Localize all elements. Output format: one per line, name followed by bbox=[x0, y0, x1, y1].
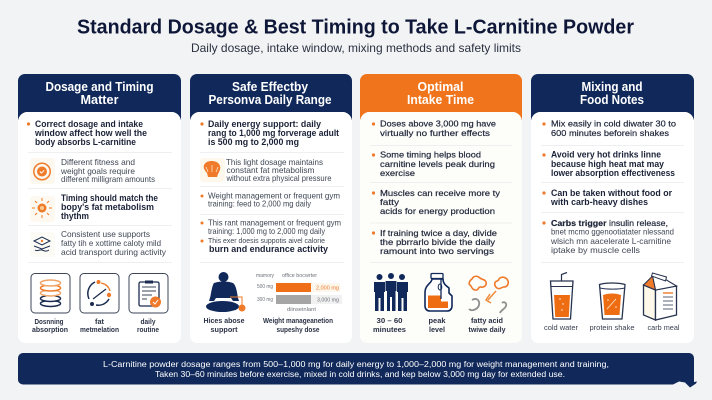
hot drinks bullet: Avoid very hot drinks linne bbox=[551, 150, 661, 160]
weight management bullet: Weight management or frequent gym bbox=[208, 190, 340, 200]
lead bullet: is 500 mg to 2,000 mg bbox=[208, 137, 299, 147]
panel 2 header: Safe Effectby bbox=[232, 80, 308, 94]
icon labels: daily bbox=[140, 317, 156, 326]
panel 4 header: Food Notes bbox=[580, 93, 644, 107]
light dosage text bbox=[226, 157, 332, 183]
icon labels: twiwe daily bbox=[468, 325, 506, 334]
timing bullet: exercise bbox=[380, 168, 415, 178]
muscles bullet: Muscles can receive more ty bbox=[380, 188, 501, 198]
icon labels bbox=[544, 323, 680, 332]
icon labels: fat bbox=[95, 317, 104, 326]
title: Standard Dosage & Best Timing to Take L-Carnitine Powder bbox=[77, 16, 634, 38]
goals text: Different fitness and bbox=[61, 157, 135, 167]
bar chart: 300 mg bbox=[257, 297, 273, 303]
footer summary banner: L-Carnitine powder dosage ranges from 500–1,000 mg for daily energy to 1,000–2,000 mg for weight management and training, bbox=[103, 360, 609, 369]
lead bullet: rang to 1,000 mg forverage adult bbox=[208, 128, 339, 138]
carbs bullet: iptake by muscle cells bbox=[551, 245, 640, 255]
weight management bullet: training: feed to 2,000 mg daily bbox=[208, 198, 312, 208]
icon: fatty acid molecules bbox=[469, 276, 508, 313]
icon labels: protein shake bbox=[590, 323, 634, 332]
lead bullet: Daily energy support: daily bbox=[208, 119, 321, 129]
icon: stacked discs bbox=[31, 274, 70, 313]
icon: target badge bbox=[30, 158, 55, 184]
twice a day bullet bbox=[372, 228, 497, 256]
timing text: thythm bbox=[61, 211, 89, 221]
icon labels bbox=[373, 316, 506, 334]
bar chart bbox=[256, 273, 342, 313]
icon: sun bbox=[30, 196, 55, 222]
panel 1 header: Dosage and Timing bbox=[46, 80, 154, 94]
carbs bullet: wlsich mn aacelerate L-carnitine bbox=[550, 236, 671, 246]
person caption bbox=[204, 316, 244, 334]
icon labels: metmelation bbox=[80, 325, 119, 334]
hot drinks bullet bbox=[542, 150, 675, 178]
training bullets bbox=[200, 218, 341, 254]
weight management bullet bbox=[200, 190, 340, 208]
mix bullet: 600 minutes beforein shakes bbox=[551, 128, 669, 138]
icon labels: carb meal bbox=[648, 323, 680, 332]
food bullet bbox=[542, 188, 672, 207]
lead bullet: Correct dosage and intake bbox=[35, 119, 143, 129]
icon labels: absorption bbox=[32, 325, 68, 334]
icon: protein shake glass bbox=[600, 283, 625, 319]
icon: seated person bbox=[206, 272, 246, 312]
icon labels: 30 – 60 bbox=[376, 316, 402, 325]
doses bullet bbox=[372, 118, 496, 138]
panel: optimal intake time bbox=[360, 74, 522, 343]
goals text bbox=[60, 157, 155, 184]
mix bullet: Mix easily in cold diwater 30 to bbox=[551, 118, 676, 128]
doses bullet: virtually no further effects bbox=[380, 128, 490, 138]
panel: safe effective daily range bbox=[190, 74, 352, 343]
doses bullet: Doses above 3,000 mg have bbox=[380, 118, 496, 128]
panel 3 header: Optimal bbox=[418, 80, 464, 94]
timing bullet bbox=[372, 150, 495, 178]
bar chart: office bocwrter bbox=[282, 273, 317, 279]
consistent use text: fatty tih e xottime caloty mild bbox=[61, 238, 161, 248]
icon labels: Dosnning bbox=[34, 317, 64, 326]
bar chart: 500 mg bbox=[257, 284, 273, 290]
bar chart: 2,000 mg bbox=[316, 286, 339, 292]
hot drinks bullet: because high heat mat may bbox=[551, 159, 664, 169]
icon labels: routine bbox=[137, 325, 159, 334]
timing text: Timing should match the bbox=[61, 193, 158, 203]
consistent use text: acid transport during activity bbox=[61, 247, 167, 257]
timing text bbox=[61, 193, 158, 221]
icon: bottle bbox=[425, 274, 452, 311]
twice a day bullet: ramount into two servings bbox=[380, 246, 494, 256]
muscles bullet: fatty bbox=[380, 197, 400, 207]
chart caption bbox=[263, 316, 333, 334]
mix bullet bbox=[542, 118, 676, 138]
hot drinks bullet: lower absorption effectiveness bbox=[551, 168, 675, 178]
consistent use text bbox=[61, 229, 167, 257]
icon labels: peak bbox=[428, 316, 446, 325]
chart caption: Weight manageanetion bbox=[263, 316, 333, 325]
twice a day bullet: the pbrrarlo bivide the daily bbox=[380, 237, 496, 247]
lead bullet: body absorbs L-carnitine bbox=[35, 137, 136, 147]
panel 2 header: Personva Daily Range bbox=[208, 93, 332, 107]
timing bullet: Some timing helps blood bbox=[380, 150, 481, 160]
goals text: weight goals require bbox=[60, 166, 135, 176]
training bullets: This rant management or frequent gym bbox=[208, 218, 341, 228]
food bullet: with carb-heavy dishes bbox=[550, 197, 648, 207]
icon: orange shell bbox=[200, 158, 225, 182]
muscles bullet bbox=[372, 188, 501, 216]
bar chart: diinseinlant bbox=[287, 307, 317, 313]
timing text: bopy's fat metabolism bbox=[61, 202, 154, 212]
panel 3 header: Intake Time bbox=[407, 93, 474, 107]
light dosage text: constant fat metabolism bbox=[226, 165, 314, 175]
footer summary banner: Taken 30–60 minutes before exercise, mixed in cold drinks, and kep below 3,000 mg day for extended use. bbox=[155, 370, 565, 379]
consistent use text: Consistent use supports bbox=[61, 229, 150, 239]
lead bullet: window affect how well the bbox=[34, 128, 147, 138]
goals text: different milligram amounts bbox=[61, 174, 155, 184]
footer summary banner bbox=[18, 353, 697, 388]
timing bullet: carnitine levels peak during bbox=[380, 159, 495, 169]
panel 1 header: Matter bbox=[80, 93, 119, 107]
training bullets: training: 1,000 mg to 2,000 mg daily bbox=[208, 226, 326, 236]
carbs bullet: Carbs trigger insulin release, bbox=[551, 218, 668, 228]
icon: clipboard routine bbox=[129, 274, 168, 313]
icon: carb meal carton bbox=[644, 273, 676, 320]
icon: transport bbox=[30, 232, 55, 257]
carbs bullet: bnet mcmo ggenootiatater nlessand bbox=[551, 226, 674, 236]
chart caption: supeshy dose bbox=[276, 325, 320, 334]
carbs bullet bbox=[542, 218, 674, 255]
panel: mixing and food notes bbox=[531, 74, 694, 343]
lead bullet bbox=[200, 119, 339, 147]
training bullets: burn and endurance activity bbox=[209, 244, 328, 254]
panel 1 header bbox=[18, 74, 181, 128]
light dosage text: This light dosage maintains bbox=[226, 157, 323, 167]
icon: cold water glass bbox=[550, 272, 573, 319]
light dosage text: without extra physical pressure bbox=[226, 173, 332, 183]
bar chart: mamory bbox=[256, 273, 274, 279]
training bullets: This exer doesis suppotis aivel calorie bbox=[208, 238, 325, 245]
icon labels: cold water bbox=[544, 323, 578, 332]
person caption: Hices abose bbox=[204, 316, 244, 325]
person caption: support bbox=[210, 325, 238, 334]
lead bullet bbox=[27, 119, 147, 147]
subtitle: Daily dosage, intake window, mixing methods and safety limits bbox=[191, 41, 521, 55]
icon labels bbox=[32, 317, 159, 334]
panel 2 header bbox=[190, 74, 352, 128]
icon: metabolism cycle bbox=[80, 274, 119, 313]
icon labels: level bbox=[429, 325, 445, 334]
panel 3 header bbox=[360, 74, 522, 128]
muscles bullet: acids for energy production bbox=[380, 206, 495, 216]
food bullet: Can be taken without food or bbox=[551, 188, 672, 198]
icon labels: minutees bbox=[373, 325, 406, 334]
panel 4 header bbox=[531, 74, 694, 128]
panel: dosage and timing matter bbox=[18, 74, 181, 343]
twice a day bullet: If training twice a day, divide bbox=[380, 228, 497, 238]
bar chart: 3,000 mg bbox=[317, 298, 339, 304]
icon: three people bbox=[374, 273, 408, 311]
icon labels: fatty acid bbox=[471, 316, 503, 325]
panel 4 header: Mixing and bbox=[582, 80, 642, 94]
